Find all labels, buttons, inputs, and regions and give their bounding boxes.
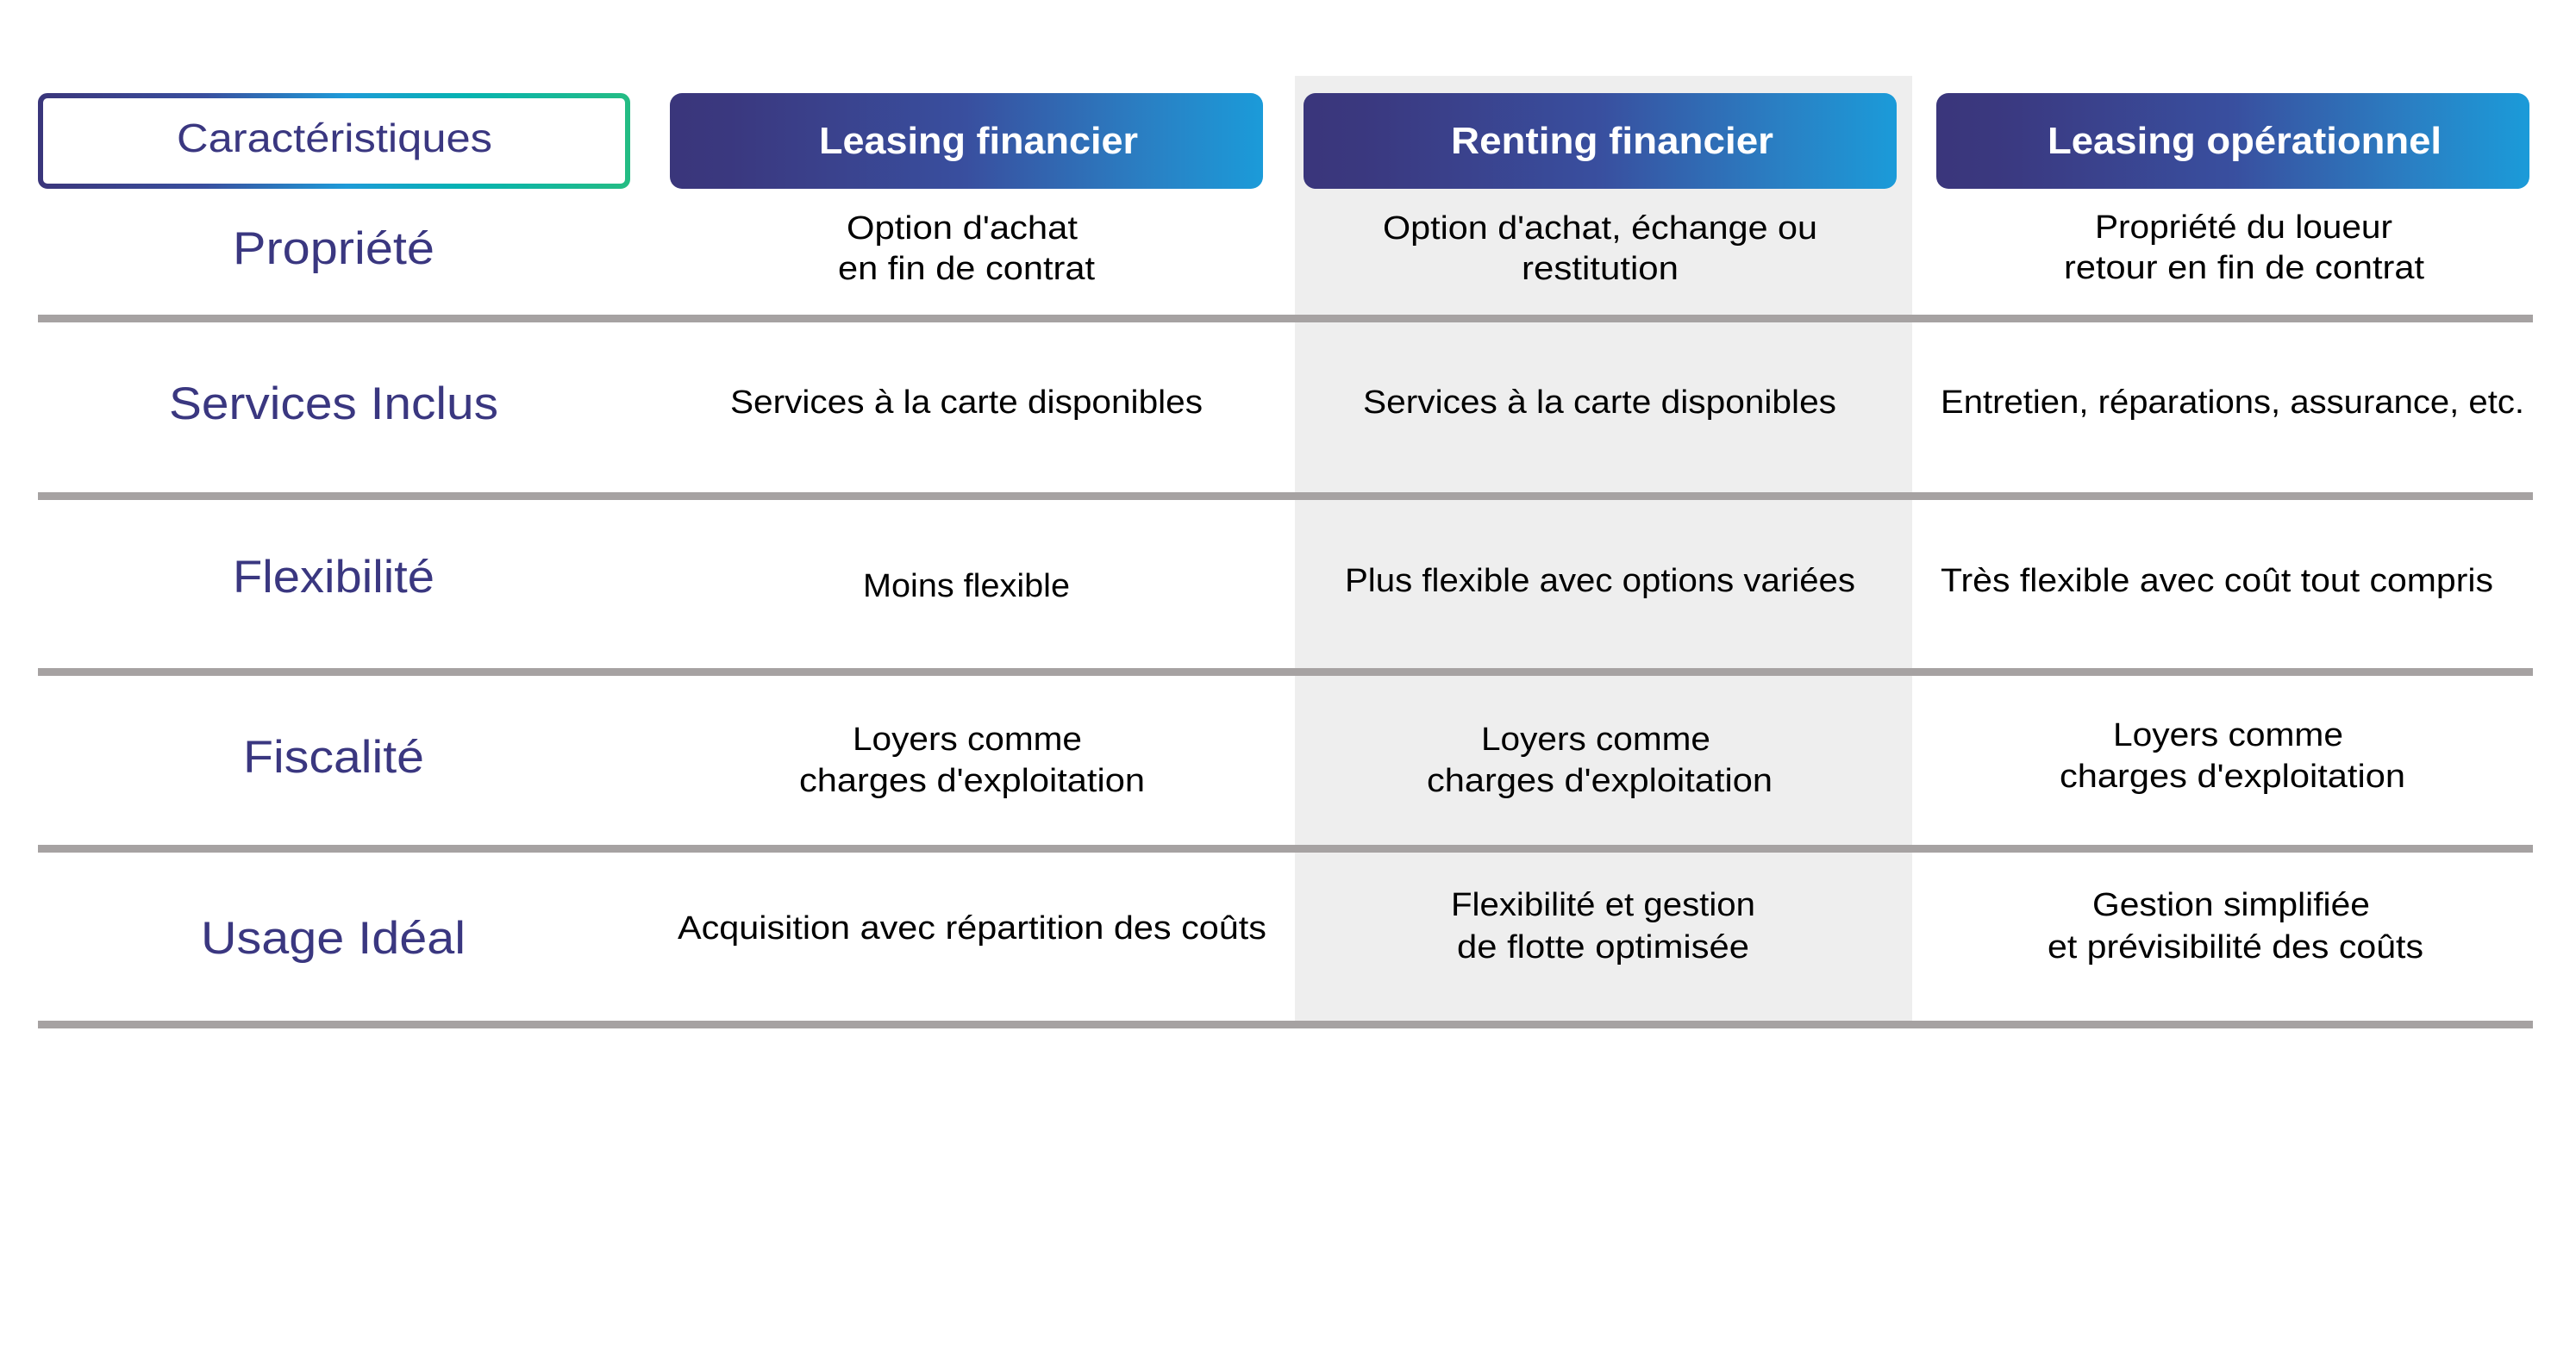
row: Propriété [233, 209, 2424, 287]
cell: Fiscalité, Leasing opérationnel: Loyers comme [2113, 717, 2343, 753]
header: Leasing opérationnel [1936, 93, 2529, 189]
row label: Usage Idéal: Usage Idéal [201, 913, 466, 964]
cell: Propriété, Renting financier [1383, 210, 1817, 287]
row: Fiscalité [243, 717, 2405, 799]
cell: Propriété, Renting financier: restitution [1522, 251, 1679, 287]
cell: Fiscalité, Renting financier: Loyers comme [1481, 722, 1710, 758]
header: Leasing financier: Leasing financier [819, 120, 1138, 162]
cell: Usage, Leasing financier: Acquisition avec répartition des coûts [678, 910, 1266, 947]
header: Renting financier [1304, 93, 1897, 189]
header: Caractéristiques: Caractéristiques [177, 116, 492, 160]
cell: Propriété, Leasing financier: en fin de contrat [838, 251, 1095, 287]
cell: Flexibilité, Renting financier: Plus flexible avec options variées [1345, 563, 1855, 599]
cell: Flexibilité, Leasing opérationnel: Très flexible avec coût tout compris [1941, 563, 2493, 599]
cell: Fiscalité, Leasing opérationnel: charges d'exploitation [2060, 759, 2405, 795]
cell: Usage, Leasing opérationnel: et prévisibilité des coûts [2048, 929, 2423, 966]
cell: Fiscalité, Leasing financier: Loyers comme [853, 722, 1082, 758]
row label: Flexibilité: Flexibilité [233, 552, 435, 603]
cell: Propriété, Leasing financier: Option d'achat [847, 210, 1078, 247]
row: Flexibilité [233, 552, 2493, 604]
cell: Usage, Leasing opérationnel [2048, 887, 2423, 966]
cell: Services, Leasing opérationnel: Entretien, réparations, assurance, etc. [1941, 384, 2524, 421]
panel: highlighted Renting financier column [1295, 76, 1912, 1024]
cell: Propriété, Leasing opérationnel: Propriété du loueur [2095, 209, 2392, 246]
cell: Propriété, Leasing opérationnel: retour en fin de contrat [2064, 250, 2424, 286]
cell: Fiscalité, Renting financier: charges d'exploitation [1427, 763, 1773, 799]
cell: Fiscalité, Leasing financier [799, 722, 1145, 799]
header: Caractéristiques [41, 96, 628, 186]
cell: Usage, Renting financier: de flotte optimisée [1457, 929, 1749, 966]
cell: Fiscalité, Renting financier [1427, 722, 1773, 799]
row label: Fiscalité: Fiscalité [243, 732, 424, 783]
cell: Propriété, Leasing opérationnel [2064, 209, 2424, 286]
row label: Services Inclus: Services Inclus [169, 378, 498, 429]
cell: Usage, Leasing opérationnel: Gestion simplifiée [2092, 887, 2370, 923]
header: Leasing opérationnel: Leasing opérationnel [2048, 120, 2442, 162]
cell: Services, Leasing financier: Services à la carte disponibles [730, 384, 1203, 421]
cell: Propriété, Renting financier: Option d'achat, échange ou [1383, 210, 1817, 247]
cell: Flexibilité, Leasing financier: Moins flexible [863, 568, 1070, 604]
row: Usage Idéal [201, 887, 2423, 966]
cell: Fiscalité, Leasing opérationnel [2060, 717, 2405, 795]
cell: Propriété, Leasing financier [838, 210, 1095, 287]
cell: Usage, Renting financier [1451, 887, 1755, 966]
row label: Propriété: Propriété [233, 223, 435, 274]
header: Leasing financier [670, 93, 1263, 189]
cell: Usage, Renting financier: Flexibilité et gestion [1451, 887, 1755, 923]
cell: Fiscalité, Leasing financier: charges d'exploitation [799, 763, 1145, 799]
row: Services Inclus [169, 378, 2524, 429]
header: Renting financier: Renting financier [1451, 120, 1773, 162]
cell: Services, Renting financier: Services à la carte disponibles [1363, 384, 1836, 421]
